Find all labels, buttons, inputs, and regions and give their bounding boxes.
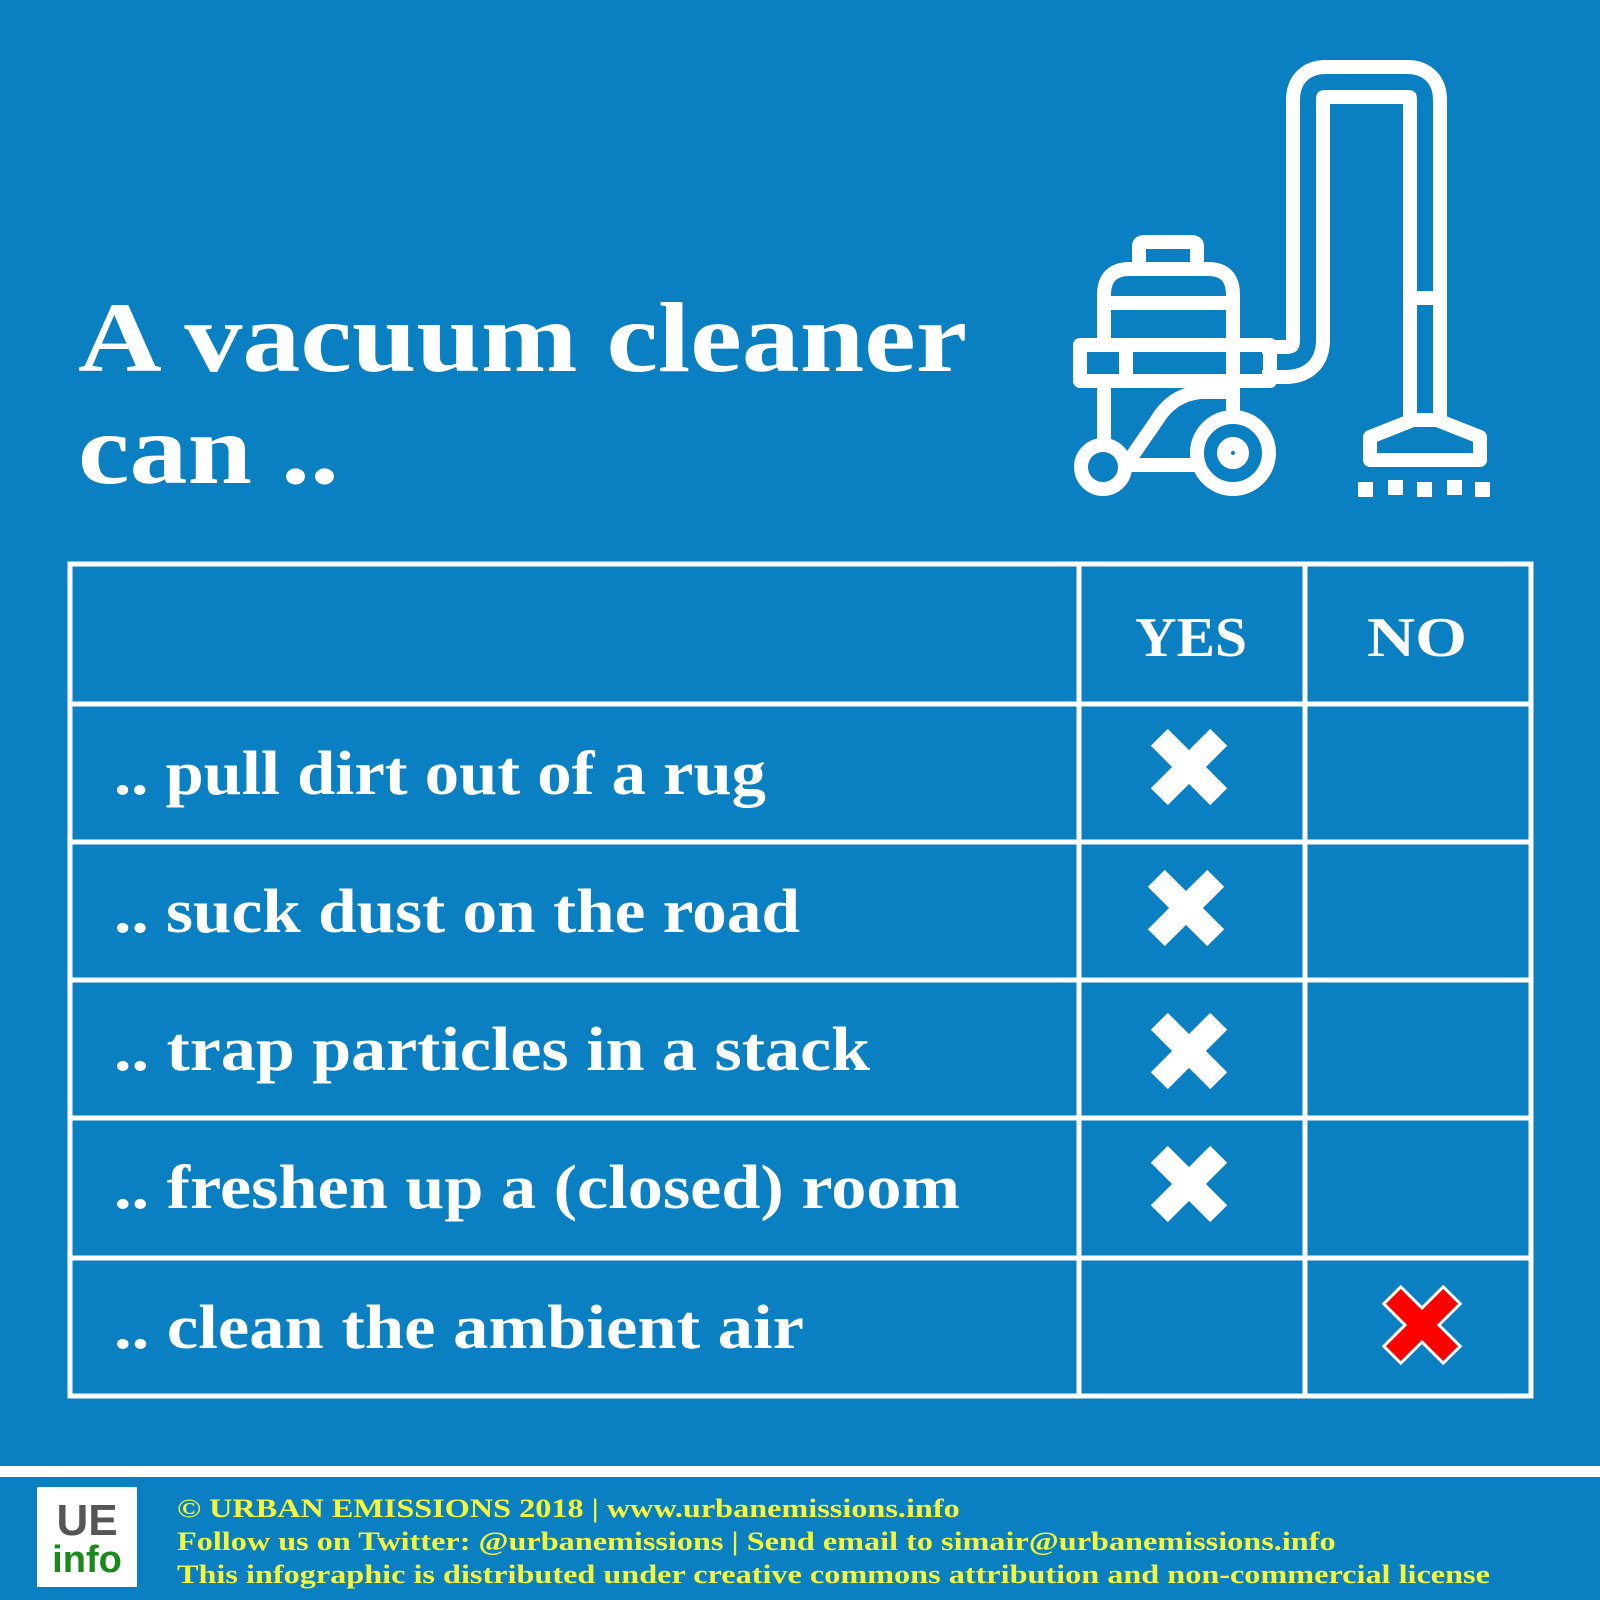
footer text: © URBAN EMISSIONS 2018 | www.urbanemissions.info <box>177 1494 960 1523</box>
title <box>78 282 967 505</box>
footer logo <box>37 1487 137 1587</box>
title: can .. <box>78 394 339 505</box>
header: NO: NO <box>1367 607 1467 669</box>
row labels: .. suck dust on the road <box>114 878 800 946</box>
header: YES: YES <box>1135 607 1247 669</box>
footer text: This infographic is distributed under creative commons attribution and non-commercial license <box>177 1560 1490 1589</box>
yes marks <box>1127 708 1248 1243</box>
footer text <box>177 1494 1490 1589</box>
footer divider <box>0 1466 1600 1477</box>
icon: vacuum cleaner <box>1073 60 1490 497</box>
row labels: .. freshen up a (closed) room <box>114 1154 960 1222</box>
no mark: red X <box>1363 1266 1481 1384</box>
footer logo: UE <box>56 1496 118 1545</box>
row labels <box>114 740 960 1362</box>
row labels: .. clean the ambient air <box>114 1294 804 1362</box>
row labels: .. pull dirt out of a rug <box>114 740 766 808</box>
row labels: .. trap particles in a stack <box>114 1016 871 1084</box>
footer logo: info <box>52 1539 122 1581</box>
title: A vacuum cleaner <box>78 282 967 393</box>
footer text: Follow us on Twitter: @urbanemissions | Send email to simair@urbanemissions.info <box>177 1527 1336 1556</box>
